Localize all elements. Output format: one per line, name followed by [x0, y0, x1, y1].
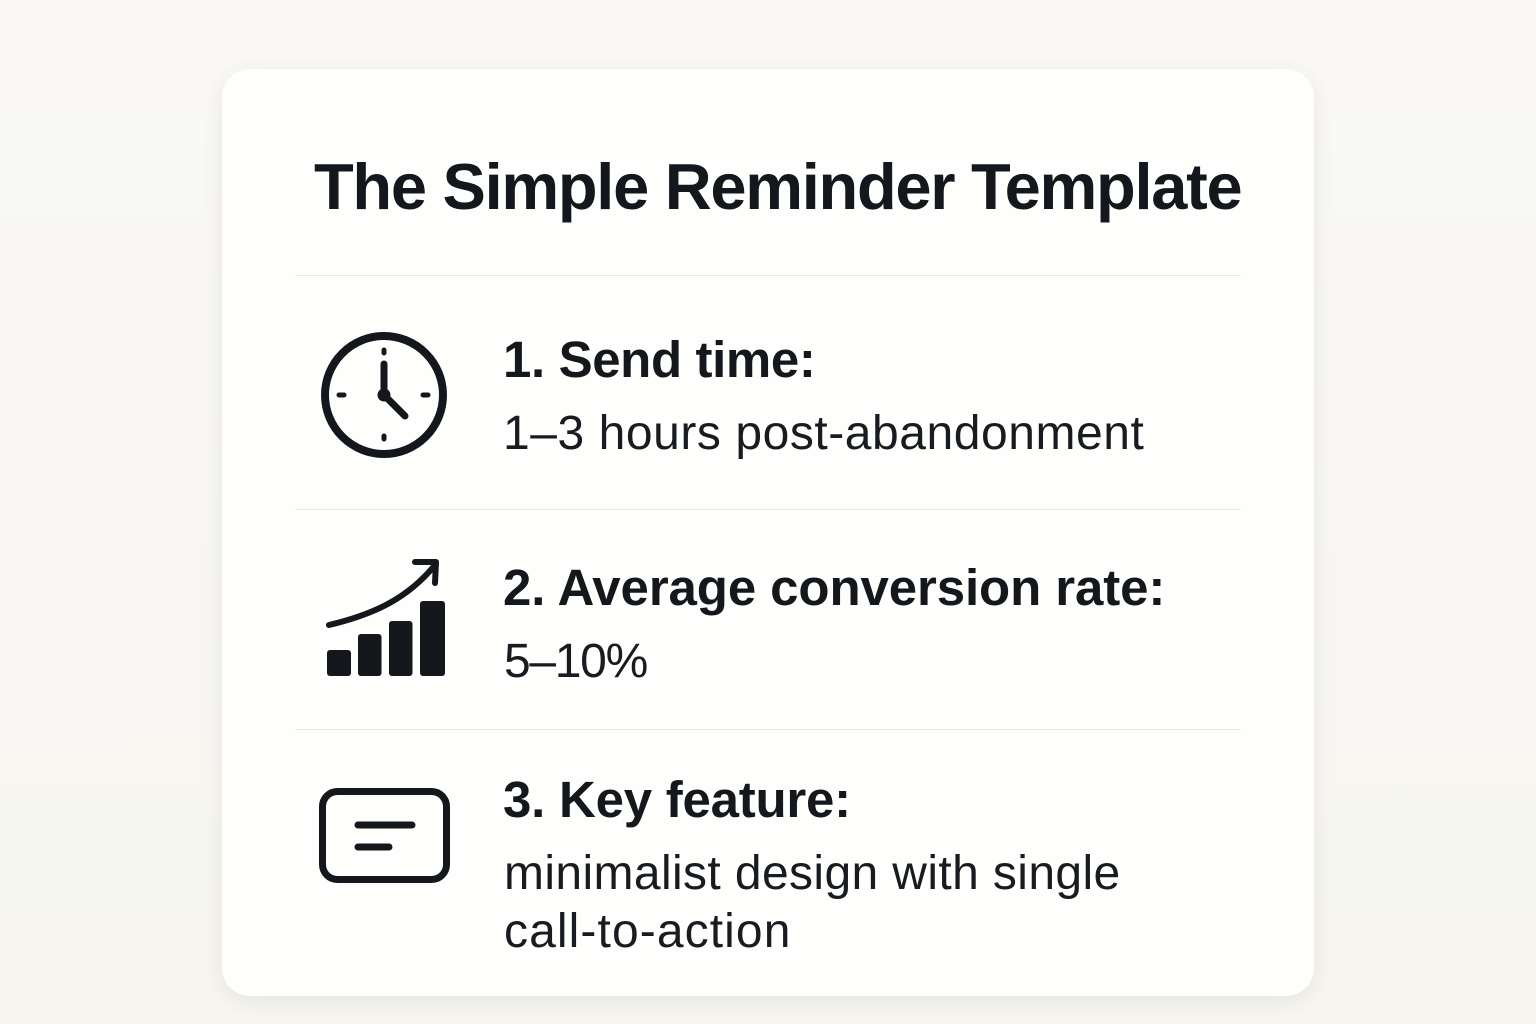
- panel: card: [222, 69, 1314, 996]
- icon: rising bar chart: [326, 559, 445, 676]
- text: conversion rate detail: 5–10%: [504, 635, 647, 688]
- heading: conversion rate: 2. Average conversion rate:: [503, 559, 1165, 616]
- title: The Simple Reminder Template: [314, 150, 1241, 223]
- heading: send time: 1. Send time:: [503, 331, 815, 388]
- text: key feature detail: call-to-action: [504, 905, 792, 958]
- heading: key feature: 3. Key feature:: [503, 771, 851, 828]
- icon: message card: [319, 788, 450, 883]
- text: send time detail: 1–3 hours post-abandonment: [503, 407, 1144, 460]
- text: key feature detail: minimalist design with single: [504, 847, 1121, 900]
- text: key feature detail: [504, 847, 1121, 958]
- icon: clock: [321, 332, 447, 458]
